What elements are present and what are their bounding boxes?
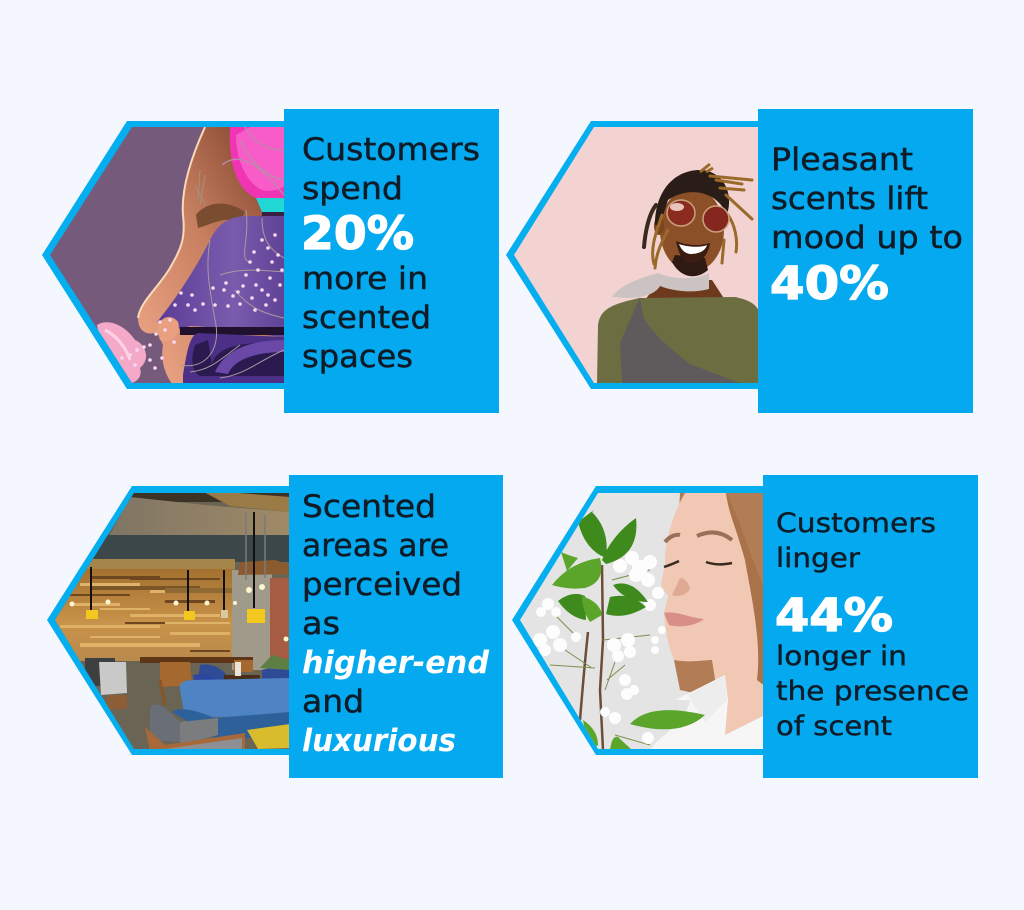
hexagon frame: cafe xyxy=(47,486,295,755)
text box: scented areas: areas are xyxy=(302,528,449,564)
text box: customers spend: spaces xyxy=(302,339,413,375)
text box: pleasant scents: Pleasant xyxy=(771,142,913,178)
hexagon frame: man xyxy=(506,121,764,389)
panel: customers spend 20% more xyxy=(40,109,499,413)
hexagon frame: woman xyxy=(512,486,769,755)
text box: customers linger: of scent xyxy=(776,711,892,742)
text box: scented areas: higher-end xyxy=(302,645,490,681)
text box: customers spend: spend xyxy=(302,171,403,207)
text box: customers linger: longer in xyxy=(776,641,907,672)
hexagon frame: nose xyxy=(42,121,290,389)
text box: customers spend: Customers xyxy=(302,132,480,168)
text box: scented areas: and xyxy=(302,684,364,720)
image: nose anatomy illustration xyxy=(50,127,284,383)
text box: customers spend xyxy=(284,109,499,413)
text box: customers linger: 44% xyxy=(775,589,893,642)
text box: customers linger: Customers xyxy=(776,508,936,539)
text box: customers spend: 20% xyxy=(301,207,414,260)
text box: customers linger: the presence xyxy=(776,676,969,707)
panel: pleasant scents lift mood xyxy=(505,109,973,413)
image: smiling man with sunglasses xyxy=(514,127,758,383)
text box: scented areas: luxurious xyxy=(302,723,456,759)
text box: customers linger xyxy=(763,475,978,778)
panel: customers linger 44% xyxy=(510,475,978,778)
text box: scented areas: as xyxy=(302,606,340,642)
image: cafe interior xyxy=(45,490,295,755)
text box: scented areas: perceived xyxy=(302,567,462,603)
text box: pleasant scents xyxy=(758,109,973,413)
text box: pleasant scents: scents lift xyxy=(771,181,928,217)
text box: scented areas xyxy=(289,475,503,778)
text box: customers spend: more in xyxy=(302,261,428,297)
image: woman smelling blossom branch xyxy=(510,490,770,755)
text box: customers linger: linger xyxy=(776,543,861,574)
text box: customers spend: scented xyxy=(302,300,431,336)
text box: pleasant scents: 40% xyxy=(770,257,889,310)
panel: scented areas higher-end xyxy=(45,475,503,778)
text box: scented areas: Scented xyxy=(302,489,436,525)
text box: pleasant scents: mood up to xyxy=(771,220,963,256)
